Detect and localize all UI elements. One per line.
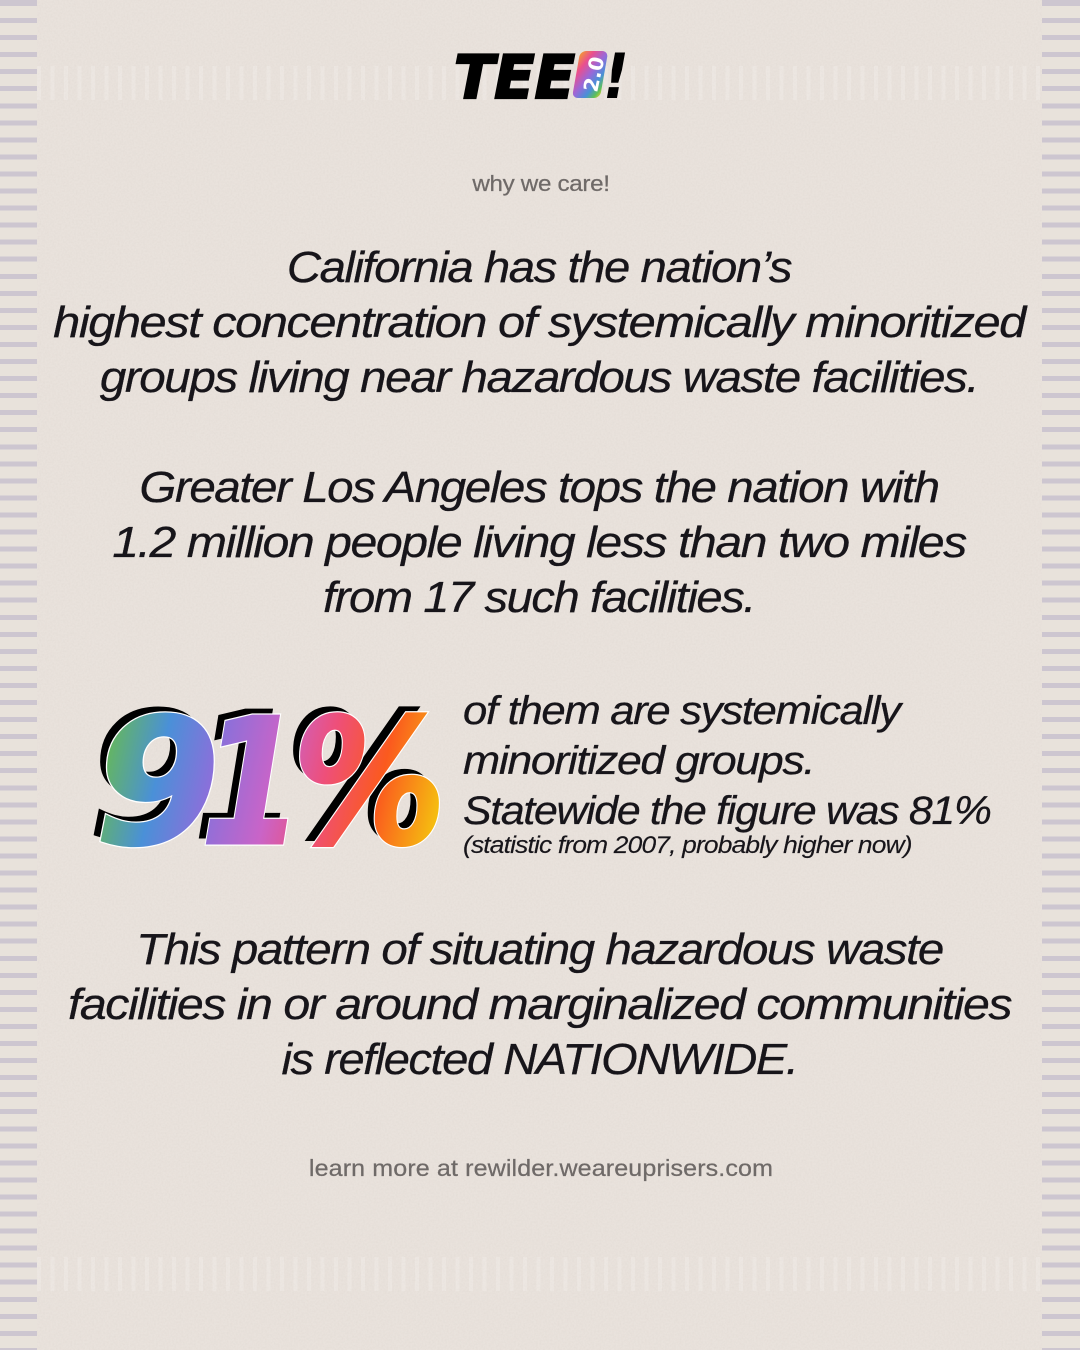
big stat: 91% [88, 690, 446, 860]
stat description [463, 689, 991, 859]
stat footnote: (statistic from 2007, probably higher now) [463, 832, 912, 859]
bottom pale tick band [37, 1257, 1042, 1291]
logo: TEE 2.0!: ! [603, 40, 629, 113]
eyebrow: why we care: why we care! [472, 171, 610, 196]
paragraph: nationwide pattern: is reflected NATIONWIDE. [282, 1035, 797, 1084]
paragraph: nationwide pattern: facilities in or around marginalized communities [68, 980, 1011, 1029]
paragraph: Greater Los Angeles statement: 1.2 million people living less than two miles [112, 518, 966, 567]
top pale tick band [37, 66, 1042, 100]
paragraph: California statement [53, 243, 1028, 402]
logo: TEE 2.0!: 2.0 [578, 54, 609, 94]
footer link text: learn more at rewilder.weareuprisers.com [309, 1155, 773, 1181]
paragraph: Greater Los Angeles statement [112, 463, 966, 622]
paragraph: nationwide pattern [68, 925, 1012, 1084]
left edge stripes [0, 0, 37, 1350]
stat description: minoritized groups. [463, 739, 814, 783]
stat description: of them are systemically [463, 689, 900, 733]
logo: TEE 2.0! [454, 40, 629, 113]
paragraph: Greater Los Angeles statement: from 17 such facilities. [323, 573, 755, 622]
right edge stripes [1042, 0, 1080, 1350]
paragraph: nationwide pattern: This pattern of situating hazardous waste [136, 925, 943, 974]
paragraph: California statement: California has the nation’s [287, 243, 791, 292]
logo: TEE 2.0!: TEE [454, 43, 575, 113]
paragraph: California statement: groups living near hazardous waste facilities. [100, 353, 978, 402]
paragraph: California statement: highest concentration of systemically minoritized [53, 298, 1025, 347]
paragraph: Greater Los Angeles statement: Greater Los Angeles tops the nation with [139, 463, 939, 512]
stat description: Statewide the figure was 81% [463, 789, 991, 833]
